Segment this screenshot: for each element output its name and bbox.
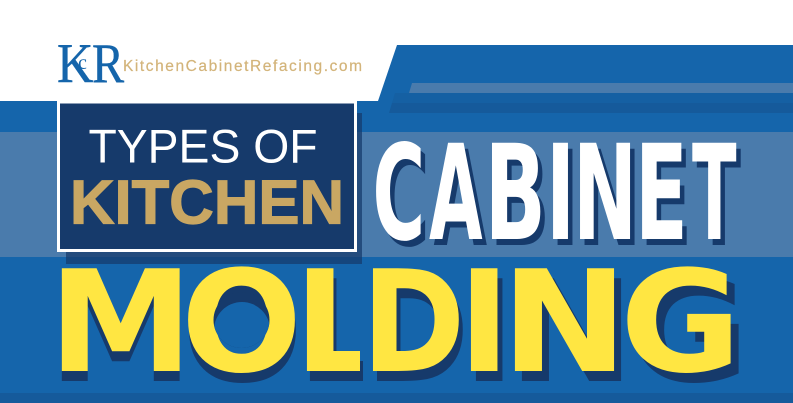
heading: cabinet: I bbox=[550, 123, 580, 277]
heading: cabinet: C bbox=[372, 117, 425, 271]
heading: molding: D bbox=[362, 241, 465, 403]
heading: molding: I bbox=[458, 241, 510, 403]
logo: KCR monogram: R bbox=[92, 33, 124, 95]
heading: molding bbox=[62, 266, 739, 383]
heading: cabinet: N bbox=[578, 124, 642, 277]
heading: cabinet: B bbox=[485, 117, 546, 270]
heading: cabinet: E bbox=[635, 117, 688, 271]
heading: cabinet: T bbox=[692, 116, 737, 271]
heading: cabinet: E bbox=[640, 123, 692, 277]
heading: molding: N bbox=[501, 240, 628, 403]
logo: website name: KitchenCabinetRefacing.com bbox=[123, 58, 362, 75]
heading: cabinet: B bbox=[489, 123, 550, 276]
logo: KCR monogram: c bbox=[78, 52, 87, 74]
heading: cabinet: N bbox=[573, 118, 637, 271]
heading: cabinet: T bbox=[696, 122, 741, 277]
title box shadow bbox=[66, 113, 362, 264]
heading: cabinet: A bbox=[429, 116, 483, 270]
heading: cabinet: I bbox=[546, 117, 575, 271]
heading: molding: L bbox=[294, 241, 384, 403]
heading: types of: TYPES OF bbox=[88, 120, 318, 174]
logo: KCR monogram: K bbox=[57, 33, 93, 95]
heading: molding: G bbox=[620, 241, 742, 403]
heading: cabinet bbox=[372, 116, 741, 277]
logo: KCR monogram bbox=[57, 33, 124, 95]
heading: molding: M bbox=[48, 240, 193, 403]
panel: types of kitchen title box bbox=[58, 102, 356, 250]
heading: cabinet: A bbox=[434, 122, 487, 276]
heading: kitchen: KITCHEN bbox=[70, 168, 344, 238]
heading: molding: O bbox=[181, 241, 302, 403]
heading: cabinet: C bbox=[377, 123, 430, 277]
